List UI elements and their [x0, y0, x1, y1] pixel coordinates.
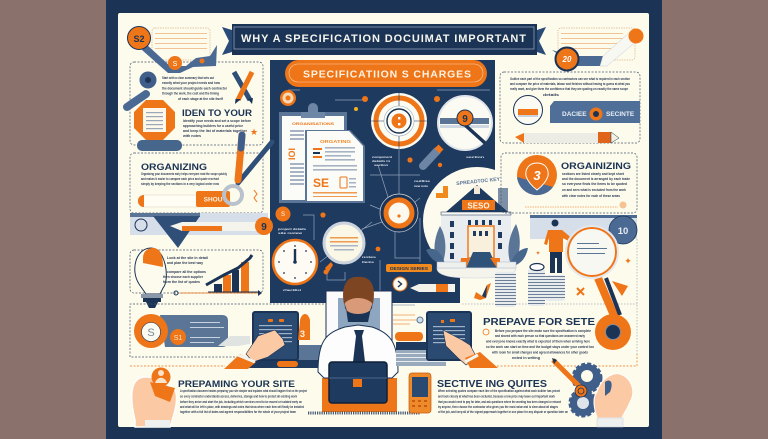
icon: person in orange [544, 220, 574, 273]
small orange dots on board [320, 96, 442, 251]
text block: prepaming [180, 389, 308, 414]
icon: orange marks: ✦ [535, 250, 541, 257]
head [344, 277, 373, 320]
orange dashed line right [497, 354, 637, 366]
text block: prepave: so the work can start on time and the budget stays under your control too [486, 345, 595, 349]
dashed frame: coins [462, 239, 637, 354]
icon: coin stacks [495, 264, 565, 307]
text block: top left: Start with a clear summary that sets out [162, 76, 215, 80]
icon: magnifier with 9 [423, 96, 492, 166]
orange desk [322, 378, 397, 412]
small board captions: notes [362, 255, 377, 259]
small board captions: section [374, 163, 388, 167]
icon: target [371, 93, 427, 149]
text block: orgainizing: with clear notes for each of these areas [561, 194, 620, 198]
text block: orgainizing: so everyone finds the items to be quoted [562, 182, 627, 186]
dotted frame: top right [500, 72, 640, 143]
bar chart [174, 255, 262, 296]
panel: coin banner: S1 [174, 335, 182, 342]
icon: arm with badges right: 20 [562, 55, 572, 64]
icon: round badge top-left of board [280, 90, 296, 106]
board connector lines [288, 90, 490, 305]
text block: top right: really want, and give them the confidence that they are quoting on exactly the same scope [510, 87, 628, 91]
text block: prepave: Before you prepare the site make sure the specification is complete [495, 329, 591, 333]
barcode strip [308, 412, 420, 414]
dotted frame: organizing [130, 153, 263, 213]
text block: organizing: simply by keeping the sections in a very logical order now [141, 182, 219, 186]
orange dashed line left [130, 365, 225, 367]
text block: sective: of the job, and keep all of the signed paperwork together in one place for any dispute or question later on [438, 410, 568, 414]
text block: organizing [141, 172, 227, 186]
icon: long pencil [515, 132, 619, 143]
blue tag: SECINTE [606, 111, 635, 118]
orange heading pill: SPECIFICATIION S CHARGES [303, 68, 471, 80]
icon: small orange pin [324, 262, 333, 274]
small board captions: items [362, 260, 374, 264]
icon: octagon document [134, 100, 182, 151]
text block: top right [510, 77, 630, 97]
search bar [138, 191, 230, 207]
text block: prepave: and shared with each person so that questions are answered early [495, 334, 585, 338]
orange label on board: DESIGN SERIES [390, 266, 428, 271]
icon: large magnifier [566, 226, 631, 350]
text block: top right: details [543, 93, 559, 97]
heading: prepaming your site: PREPAMING YOUR SITE [178, 379, 295, 390]
heading: prepave for sete: PREPAVE FOR SETE [483, 317, 595, 328]
icon: centre hub ring [380, 194, 418, 232]
laptop left: 3 [300, 329, 305, 339]
text block: sective: by anyone, then choose the contractor who gives you the most value and is clear about all stages [438, 405, 558, 409]
dotted frame: top left [130, 62, 263, 145]
text block: orgainizing [561, 172, 630, 198]
building illustration: SESO [467, 202, 490, 210]
blue tag [550, 101, 640, 123]
orange label on board [386, 264, 432, 272]
laptop left [245, 312, 330, 368]
icon: orange marks [474, 250, 632, 300]
icon: arrow badge [393, 277, 407, 291]
icon: hand left [224, 330, 285, 369]
text block: prepaming: A specification document makes preparing your site simpler and explains what should happen first on the project [180, 389, 308, 393]
icon: wrench [224, 135, 272, 204]
text block: bulb: compare all the options [167, 270, 206, 274]
front document: ORGATING [320, 139, 352, 144]
icon: star: ★ [250, 127, 258, 137]
blue tag: DACIEE [562, 111, 587, 118]
icon: arm with badges [128, 26, 217, 73]
icon: clock [273, 240, 317, 284]
orange heading pill [285, 60, 487, 87]
text block: bulb [163, 256, 208, 284]
text block: under iden to your [182, 119, 251, 138]
text block: orgainizing: and the document is arranged by each trade [562, 177, 630, 181]
icon: badge 3: 3 [533, 168, 541, 183]
icon: knob [127, 72, 156, 107]
icon: lightbulb [135, 248, 166, 308]
icon: gear, pencil and hand [552, 358, 633, 427]
icon: lens with bar [514, 96, 542, 124]
small board captions: section [466, 155, 484, 159]
text block: top left [162, 76, 228, 101]
text block: bulb: Look at the site in detail [167, 256, 208, 260]
dotted frame: coin row [130, 304, 324, 357]
navy frame [106, 0, 662, 439]
icon: arm with badges: S [173, 61, 178, 68]
text block: bulb: then choose each supplier [163, 275, 204, 279]
icon: hand holding badge left [132, 368, 177, 427]
document stack [279, 103, 365, 203]
text block: top left: exactly what your project needs and how [162, 81, 220, 85]
small board captions: outline [414, 179, 431, 183]
dotted frame: organizing right [501, 153, 637, 213]
dotted note top left [152, 28, 210, 60]
icon: arm with badges: S2 [133, 34, 145, 44]
text block: top left: of each stage at the site itself [178, 97, 224, 101]
text block: sective: that you would need to pay for later, and ask questions where the wording has been changed or missed [438, 400, 561, 404]
text block: prepave: and everyone knows exactly what is expected of them when arriving here [486, 340, 590, 344]
text block: orgainizing: on and sees what is excluded from the work [562, 188, 626, 192]
briefcase [329, 362, 387, 403]
shirt [318, 325, 398, 378]
front document [305, 130, 365, 203]
cream page [118, 13, 649, 427]
building illustration [423, 167, 531, 278]
heading: iden to your: IDEN TO YOUR [182, 108, 252, 119]
text block: prepaming: and what will be left in place, with drawings and notes that show where each item will finally be installed [180, 405, 304, 409]
text block: organizing: Organizing your documents early helps everyone read the scope quickly [141, 172, 227, 176]
icon: lens with lines [324, 223, 364, 263]
text block: prepaming: together with a full list of dates and agreed responsibilities for the whole of your project team [180, 410, 296, 414]
strip with pencil and badge: 9 [261, 222, 267, 233]
icon: crossed pencils [234, 72, 253, 104]
text block: under iden to your: approaching builders for a useful price [183, 124, 243, 128]
text block: orgainizing: sections are listed clearly and kept short [562, 172, 625, 176]
text block: prepave: with room for small changes and agreed allowances for other goods [491, 350, 588, 354]
small board captions [278, 155, 484, 292]
small board captions: site review [278, 231, 303, 235]
text block: sective: When selecting quotes compare each line of the specification against what each builder has priced [438, 389, 560, 393]
heading: organizing: ORGANIZING [141, 162, 207, 173]
monitor [326, 291, 392, 351]
panel: central dark board [270, 60, 495, 303]
text block: prepaming: so every contractor understands access, deliveries, storage and how to protect all existing work [180, 394, 297, 398]
icon: orange marks: ✦ [624, 256, 632, 266]
orange dotted line with badge [525, 202, 626, 208]
panel: coin banner: S [147, 327, 155, 339]
title banner: WHY A SPECIFICATION DOCUIMAT IMPORTANT [241, 33, 526, 45]
icon: hand right [443, 330, 498, 368]
text block: top left: the document should guide each contractor [162, 86, 228, 90]
icon: pencil on board [410, 284, 455, 292]
small board captions: component [372, 155, 392, 159]
text block: under iden to your: with notes [182, 134, 201, 138]
building illustration: SPREADTOC KEY [456, 176, 501, 187]
text block: bulb: from the list of quotes [163, 280, 200, 284]
text block: under iden to your: and keep the list of materials together [183, 129, 248, 133]
small board captions: checklist [283, 288, 301, 292]
laptop right [393, 312, 471, 366]
dotted note top right [558, 28, 635, 60]
panel: coin banner [134, 314, 250, 348]
text block: sective: and look closely at what has been excluded, because a low price may leave out important work [438, 394, 555, 398]
text block: top right: and compare the price of materials, labour and finishes without having to guess at what you [510, 82, 630, 86]
strip with pencil and badge [130, 213, 273, 248]
small board captions: details in [372, 159, 390, 163]
text block: prepaming: before they arrive and start the job, including which services need to be moved or isolated early on [180, 400, 302, 404]
text block: sective [438, 389, 568, 414]
search bar: SHOU [204, 196, 223, 204]
person at desk [308, 277, 420, 413]
front document: SE [313, 176, 329, 190]
text block: prepave [483, 329, 595, 360]
tie [353, 330, 365, 362]
icon: round badge lower-left of board: S [281, 212, 285, 218]
heading: orgainizing: ORGAINIZING [561, 161, 631, 172]
text block: bulb: and plan the best way [167, 261, 203, 265]
heading: sective ing quites: SECTIVE ING QUITES [437, 379, 547, 390]
back document [279, 103, 347, 203]
title banner [222, 24, 546, 55]
small board captions: project details [278, 227, 306, 231]
icon: phone device [409, 373, 431, 413]
icon: magnifier with 9: 9 [462, 114, 468, 125]
text block: under iden to your: Identify your needs and set a scope before [183, 119, 251, 123]
icon: round badge lower-left of board [276, 206, 290, 222]
icon: badge 3 [517, 155, 557, 195]
dotted frame: bulb and chart [130, 250, 263, 293]
strip with 10 badge [530, 215, 637, 244]
text block: top left: through the work, the cost and the timing [162, 92, 219, 96]
back document: ORGANISATIONS [292, 122, 335, 126]
icon: arm with badges right [552, 28, 644, 70]
small board captions: new note [414, 184, 428, 188]
back document: IOI [287, 148, 297, 160]
text block: prepave: noted in writing [512, 356, 540, 360]
text block: top right: Outline each part of the specification so contractors can see what is required in each section [510, 77, 630, 81]
strip with 10 badge: 10 [618, 226, 628, 237]
text block: organizing: and makes it easier to compare each price and quote received [141, 177, 219, 181]
